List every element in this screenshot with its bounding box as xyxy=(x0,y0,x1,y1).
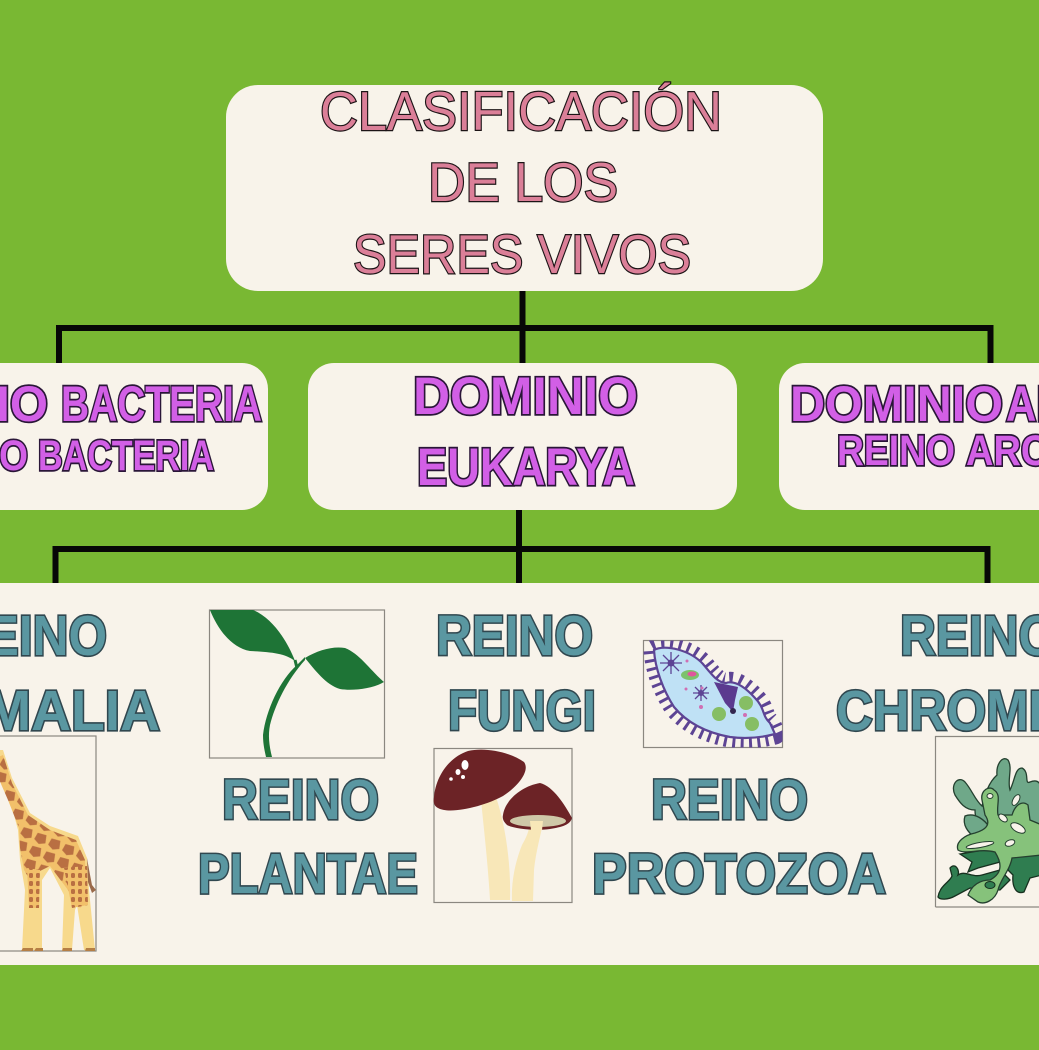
title: line 1: CLASIFICACIÓN xyxy=(320,80,722,142)
label: reino protozoa xyxy=(592,768,886,905)
panel: dominio archaea xyxy=(779,363,1039,510)
text: reino archaea: REINO xyxy=(837,427,955,475)
title: line 3: SERES VIVOS xyxy=(353,223,691,285)
heading: dominio bacteria xyxy=(0,376,262,432)
heading: dominio: DOMINIO xyxy=(413,367,638,426)
text: reino archaea xyxy=(837,427,1039,475)
icon: mushrooms xyxy=(434,748,572,902)
label: reino protozoa: REINO xyxy=(651,768,808,831)
heading: dominio archaea: DOMINIO xyxy=(790,376,1003,432)
connector lines: kingdoms xyxy=(56,510,988,583)
label: reino protozoa: PROTOZOA xyxy=(592,842,886,905)
label: reino plantae: REINO xyxy=(222,768,379,831)
text: reino bacteria xyxy=(0,432,214,480)
heading: dominio bacteria: BACTERIA xyxy=(61,376,262,432)
label: reino chromista xyxy=(836,604,1039,742)
icon: paramecium xyxy=(644,640,782,748)
panel: kingdoms band xyxy=(0,583,1039,965)
icon: plant sprout xyxy=(210,610,384,758)
label: reino fungi xyxy=(436,604,596,742)
label: reino fungi: REINO xyxy=(436,604,593,667)
label: reino animalia xyxy=(0,604,160,742)
panel: dominio eukarya xyxy=(308,363,737,510)
connector lines: top level xyxy=(59,291,990,363)
heading: eukarya: EUKARYA xyxy=(417,438,635,497)
icon: chromista seaweed xyxy=(936,736,1039,907)
title: line 2: DE LOS xyxy=(428,151,618,213)
icon: giraffe xyxy=(0,736,96,951)
title panel xyxy=(226,80,823,291)
text: reino bacteria: BACTERIA xyxy=(38,432,214,480)
label: reino fungi: FUNGI xyxy=(448,679,596,742)
panel: dominio bacteria xyxy=(0,363,268,510)
label: reino plantae xyxy=(198,768,418,905)
label: reino plantae: PLANTAE xyxy=(198,842,418,905)
